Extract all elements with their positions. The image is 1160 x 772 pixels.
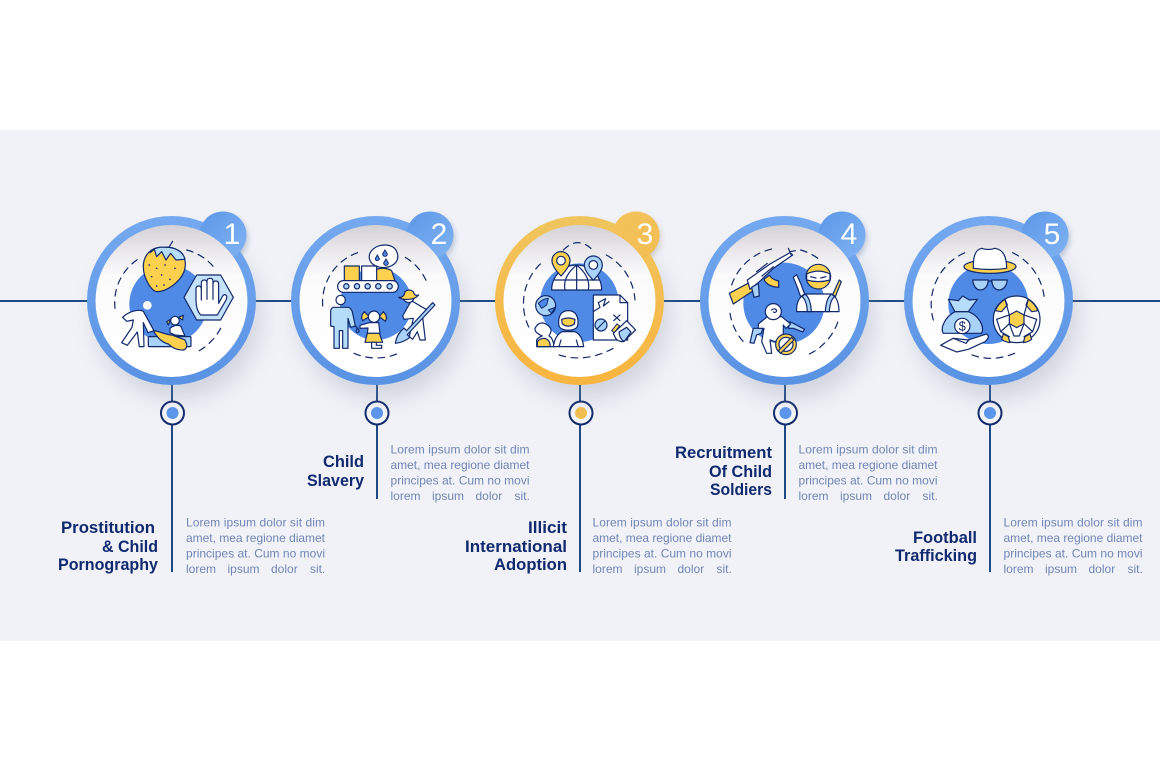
body text 4: ipsum xyxy=(840,489,872,503)
heading 4: Of Child xyxy=(709,463,772,481)
body text 2: principes at. Cum no movi xyxy=(390,474,530,488)
body text 5: principes at. Cum no movi xyxy=(1004,546,1142,560)
body text 5: dolor xyxy=(1088,562,1115,576)
body text 2: lorem xyxy=(390,489,421,503)
heading 4 xyxy=(675,444,772,499)
body text 4: amet, mea regione diamet xyxy=(798,458,938,472)
body text 2: sit. xyxy=(514,489,530,503)
body text 1: lorem xyxy=(186,562,216,576)
circle badge 2 xyxy=(291,212,464,398)
body text 5 xyxy=(1004,516,1143,576)
circle badge 1 xyxy=(87,212,260,398)
connector and node 4 xyxy=(774,380,797,499)
body text 5: lorem xyxy=(1004,562,1034,576)
body text 3 xyxy=(592,516,732,576)
circle badge 4: 4 xyxy=(841,218,857,251)
heading 4: Recruitment xyxy=(675,444,772,462)
body text 5: Lorem ipsum dolor sit dim xyxy=(1004,516,1142,530)
heading 4: Soldiers xyxy=(710,481,772,499)
body text 3: ipsum xyxy=(634,562,666,576)
body text 2: ipsum xyxy=(432,489,464,503)
heading 1: & Child xyxy=(102,538,158,556)
body text 2: dolor xyxy=(476,489,502,503)
body text 1: dolor xyxy=(271,562,298,576)
body text 3: Lorem ipsum dolor sit dim xyxy=(592,516,732,530)
circle badge 4 xyxy=(700,212,873,398)
icon: strawberry, stop hand and abuse figures xyxy=(115,241,233,351)
heading 3: International xyxy=(465,538,567,556)
heading 1 xyxy=(58,519,159,574)
heading 2: Child xyxy=(323,453,364,471)
heading 3: Illicit xyxy=(528,519,568,537)
step 4: recruitment of child soldiers xyxy=(675,212,938,503)
heading 1: Pornography xyxy=(58,556,159,574)
step 5: football trafficking xyxy=(895,212,1143,576)
connector and node 2 xyxy=(366,380,388,499)
connector and node 5 xyxy=(978,380,1002,572)
body text 1: principes at. Cum no movi xyxy=(186,546,325,560)
body text 4 xyxy=(798,442,938,503)
body text 4: lorem xyxy=(798,489,829,503)
body text 3: sit. xyxy=(716,562,732,576)
circle badge 2: 2 xyxy=(431,218,447,251)
circle badge 5: 5 xyxy=(1044,218,1060,251)
body text 5: amet, mea regione diamet xyxy=(1004,531,1143,545)
body text 1: ipsum xyxy=(228,562,260,576)
body text 2: Lorem ipsum dolor sit dim xyxy=(390,442,530,456)
circle badge 3 xyxy=(495,212,668,398)
step 2: child slavery xyxy=(291,212,530,503)
heading 3: Adoption xyxy=(494,556,567,574)
icon: hat, sunglasses, money bag and football xyxy=(931,248,1044,358)
heading 3 xyxy=(465,519,568,574)
heading 1: Prostitution xyxy=(61,519,155,537)
body text 4: principes at. Cum no movi xyxy=(798,474,938,488)
step 1: prostitution and child pornography xyxy=(58,212,326,576)
heading 2: Slavery xyxy=(307,472,365,490)
heading 5: Football xyxy=(913,529,977,547)
body text 4: sit. xyxy=(922,489,938,503)
body text 4: Lorem ipsum dolor sit dim xyxy=(798,442,938,456)
circle badge 1: 1 xyxy=(224,218,240,251)
connector and node 1 xyxy=(161,380,184,572)
heading 5: Trafficking xyxy=(895,547,977,565)
circle badge 3: 3 xyxy=(637,218,653,251)
circle badge 5 xyxy=(904,212,1077,398)
background panel xyxy=(0,130,1160,641)
icon: hat, sunglasses, money bag and football: $ xyxy=(959,320,966,334)
body text 2: amet, mea regione diamet xyxy=(390,458,530,472)
body text 3: principes at. Cum no movi xyxy=(592,546,732,560)
body text 3: dolor xyxy=(678,562,704,576)
body text 1: Lorem ipsum dolor sit dim xyxy=(186,516,325,530)
body text 1 xyxy=(186,516,326,576)
connector and node 3 xyxy=(570,380,592,572)
icon: conveyor, man, child and farmer xyxy=(323,245,435,358)
body text 3: lorem xyxy=(592,562,623,576)
timeline horizontal line xyxy=(0,300,1160,302)
icon: globe, location pins, hooded figure and torn document xyxy=(523,243,636,358)
body text 4: dolor xyxy=(884,489,910,503)
step 3: illicit international adoption xyxy=(465,212,732,576)
heading 2 xyxy=(307,453,365,490)
body text 2 xyxy=(390,442,530,503)
body text 1: amet, mea regione diamet xyxy=(186,531,326,545)
body text 5: sit. xyxy=(1128,562,1143,576)
body text 3: amet, mea regione diamet xyxy=(592,531,732,545)
icon: rifle, masked soldier and armed child xyxy=(729,248,841,355)
body text 1: sit. xyxy=(310,562,325,576)
body text 5: ipsum xyxy=(1045,562,1077,576)
heading 5 xyxy=(895,529,977,565)
